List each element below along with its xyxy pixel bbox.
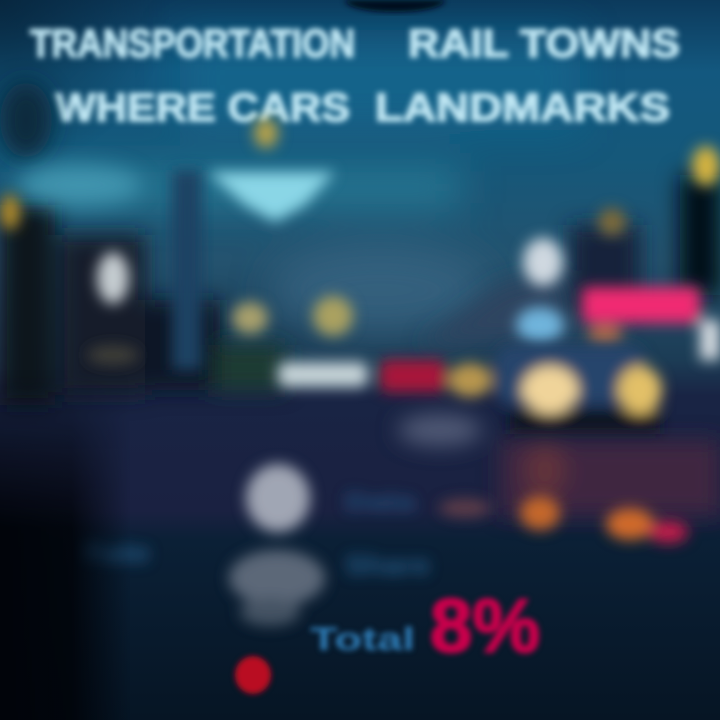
lower data labels: [80, 489, 430, 580]
wet road reflections: [398, 414, 720, 515]
lower data labels: Rate: [80, 537, 150, 568]
central light shape: [208, 172, 335, 222]
skyline silhouettes: [0, 82, 720, 405]
left light shape: [18, 165, 142, 205]
left edge shadow: [0, 398, 124, 720]
title: RAIL TOWNS: [408, 22, 680, 66]
pink neon sign: [516, 287, 720, 360]
title: WHERE CARS: [55, 86, 350, 130]
red marker: [235, 656, 271, 694]
tower: [172, 170, 202, 370]
top dark notch: [345, 0, 445, 12]
total label: Total: [310, 621, 415, 657]
lower data labels: Share: [345, 550, 430, 580]
lower data icon: [229, 464, 325, 626]
sky glow band: [20, 30, 580, 335]
title: TRANSPORTATION: [30, 22, 355, 66]
traffic row: [278, 345, 662, 434]
red percentage figure: 8%: [430, 584, 540, 669]
title: [30, 22, 680, 130]
top left corner shade: [0, 0, 170, 170]
title: LANDMARKS: [375, 86, 670, 130]
lower data labels: Data: [345, 489, 416, 516]
orange road reflections: [439, 496, 688, 543]
street lights and lamps: [0, 118, 720, 365]
